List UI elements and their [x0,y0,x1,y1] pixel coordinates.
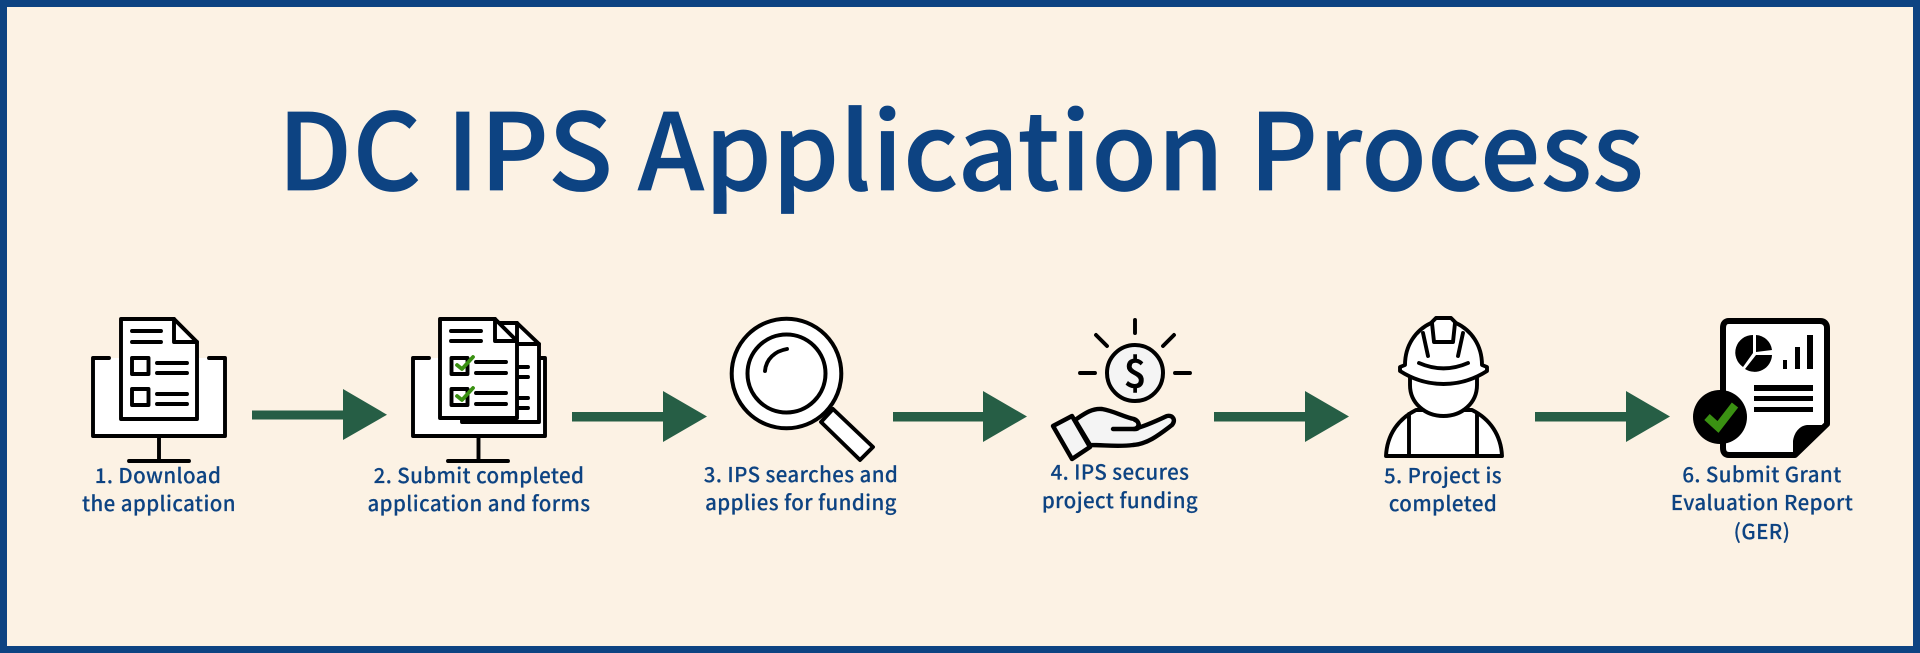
step 6: submit grant evaluation report [1671,321,1853,545]
icon: magnifying glass [732,319,873,460]
label: step 6: 6. Submit Grant [1682,458,1842,488]
icon: monitor with checked forms [413,319,545,461]
label: step 1: 1. Download [95,459,221,489]
arrow 5 [1535,391,1670,442]
icon: construction worker [1386,318,1502,456]
step 2: submit completed application and forms [367,319,591,517]
icon: report with check badge [1693,321,1830,458]
title: DC IPS Application Process [278,67,1644,221]
icon: hand holding coin [1053,320,1190,459]
label: step 5: completed [1389,487,1497,517]
step 5: project is completed [1384,318,1502,517]
icon: hand holding coin: $ [1124,344,1146,400]
arrow 1 [252,389,387,440]
arrow 2 [572,391,707,442]
step 3: IPS searches and applies for funding [704,319,898,516]
label: step 2: 2. Submit completed [374,459,584,489]
label: step 6: Evaluation Report [1671,486,1853,516]
label: step 3: 3. IPS searches and [704,458,898,488]
label: step 1: the application [82,487,236,517]
arrow 4 [1214,391,1349,442]
label: step 3: applies for funding [705,486,897,516]
label: step 4: project funding [1042,484,1198,514]
label: step 2: application and forms [367,487,591,517]
step 1: download the application [82,319,236,517]
label: step 5: 5. Project is [1384,459,1502,489]
label: step 6: (GER) [1734,515,1790,545]
arrow 3 [893,391,1027,442]
step 4: IPS secures project funding [1042,320,1198,514]
icon: monitor with form [93,319,225,461]
label: step 4: 4. IPS secures [1051,456,1189,486]
